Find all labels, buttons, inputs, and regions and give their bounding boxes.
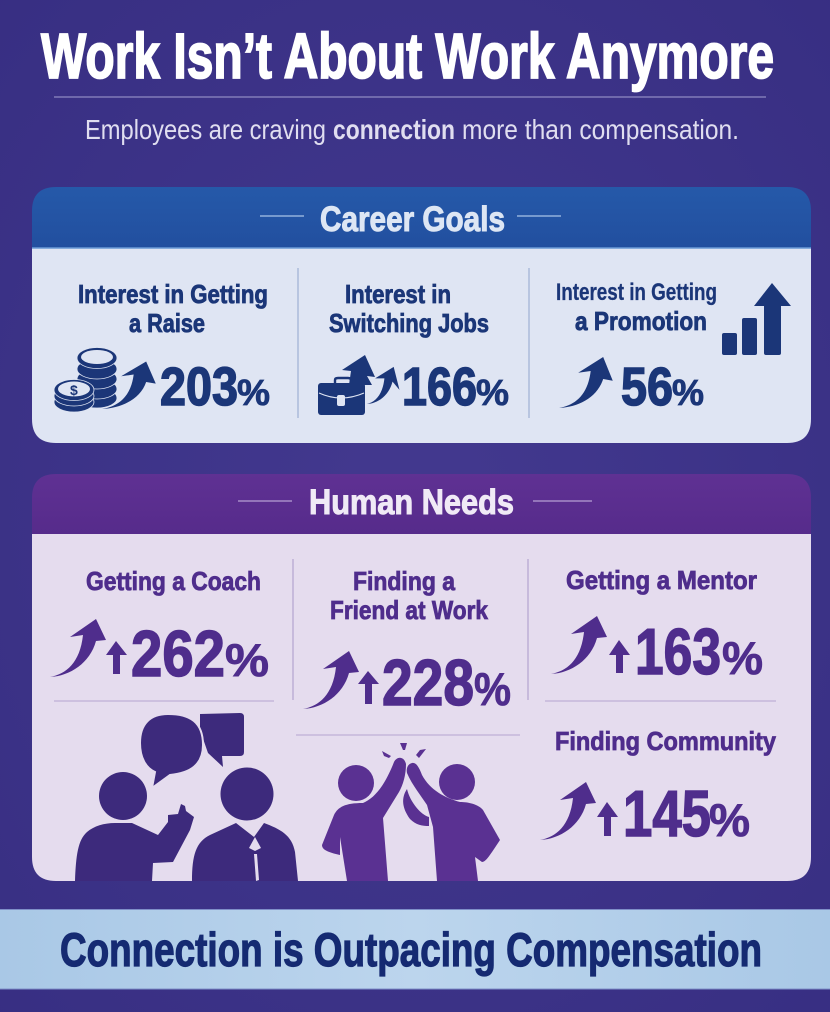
human needs header: Human Needs [309, 483, 514, 522]
stat: promotion: Interest in Getting [556, 279, 717, 306]
stat: switching jobs: Interest in [345, 279, 451, 309]
value: 262%: % [225, 634, 269, 686]
value: 228%: 228 [382, 646, 474, 719]
stat: friend at work [303, 566, 511, 719]
human needs header [32, 474, 811, 534]
subtitle: connection [333, 114, 455, 145]
value: 166%: % [476, 372, 509, 413]
stat: community: Finding Community [555, 726, 776, 756]
panel: career goals [32, 187, 811, 443]
stat: switching jobs: Switching Jobs [329, 308, 489, 338]
stat: switching jobs [318, 279, 509, 417]
stat: raise: a Raise [129, 308, 205, 338]
stat: friend at work: Finding a [353, 566, 455, 596]
career goals header [32, 187, 811, 248]
value: 56%: 56 [621, 357, 673, 417]
illustration: two people high-fiving [322, 743, 500, 881]
icon: coins: $ [70, 382, 78, 398]
subtitle [85, 114, 739, 145]
icon: arrows [540, 782, 618, 840]
illustration: two people talking [75, 713, 298, 881]
stat: community [540, 726, 776, 850]
panel: human needs [32, 474, 811, 881]
value: 56%: % [672, 372, 704, 413]
stat: raise [54, 279, 270, 417]
value: 166%: 166 [402, 357, 477, 417]
value: 203%: % [237, 372, 270, 413]
value: 262%: 262 [131, 617, 225, 690]
icon: arrows [303, 651, 379, 709]
icon: arrows [551, 616, 630, 674]
value: 145%: 145 [623, 777, 711, 850]
footer banner [0, 909, 830, 989]
stat: mentor: Getting a Mentor [566, 565, 757, 595]
value: 228%: % [474, 663, 511, 715]
stat: raise: Interest in Getting [78, 279, 268, 309]
stat: mentor [551, 565, 763, 688]
value: 203%: 203 [160, 357, 238, 417]
subtitle: Employees are craving [85, 114, 326, 145]
value: 145%: % [709, 794, 750, 846]
icon: briefcase [318, 355, 375, 415]
icon: coins [54, 348, 117, 412]
stat: friend at work: Friend at Work [330, 595, 488, 625]
icon: growth arrow [102, 361, 156, 409]
stat: coach [50, 566, 269, 690]
icon: rising bars [722, 283, 791, 355]
icon: growth arrow [559, 357, 613, 408]
stat: coach: Getting a Coach [86, 566, 261, 596]
stat: promotion [556, 279, 791, 417]
icon: arrows [50, 619, 127, 677]
career goals header: Career Goals [320, 200, 505, 239]
stat: promotion: a Promotion [575, 306, 707, 336]
subtitle: more than compensation. [462, 114, 739, 145]
icon: growth arrow [367, 367, 399, 404]
value: 163%: 163 [635, 615, 721, 688]
value: 163%: % [722, 632, 763, 684]
